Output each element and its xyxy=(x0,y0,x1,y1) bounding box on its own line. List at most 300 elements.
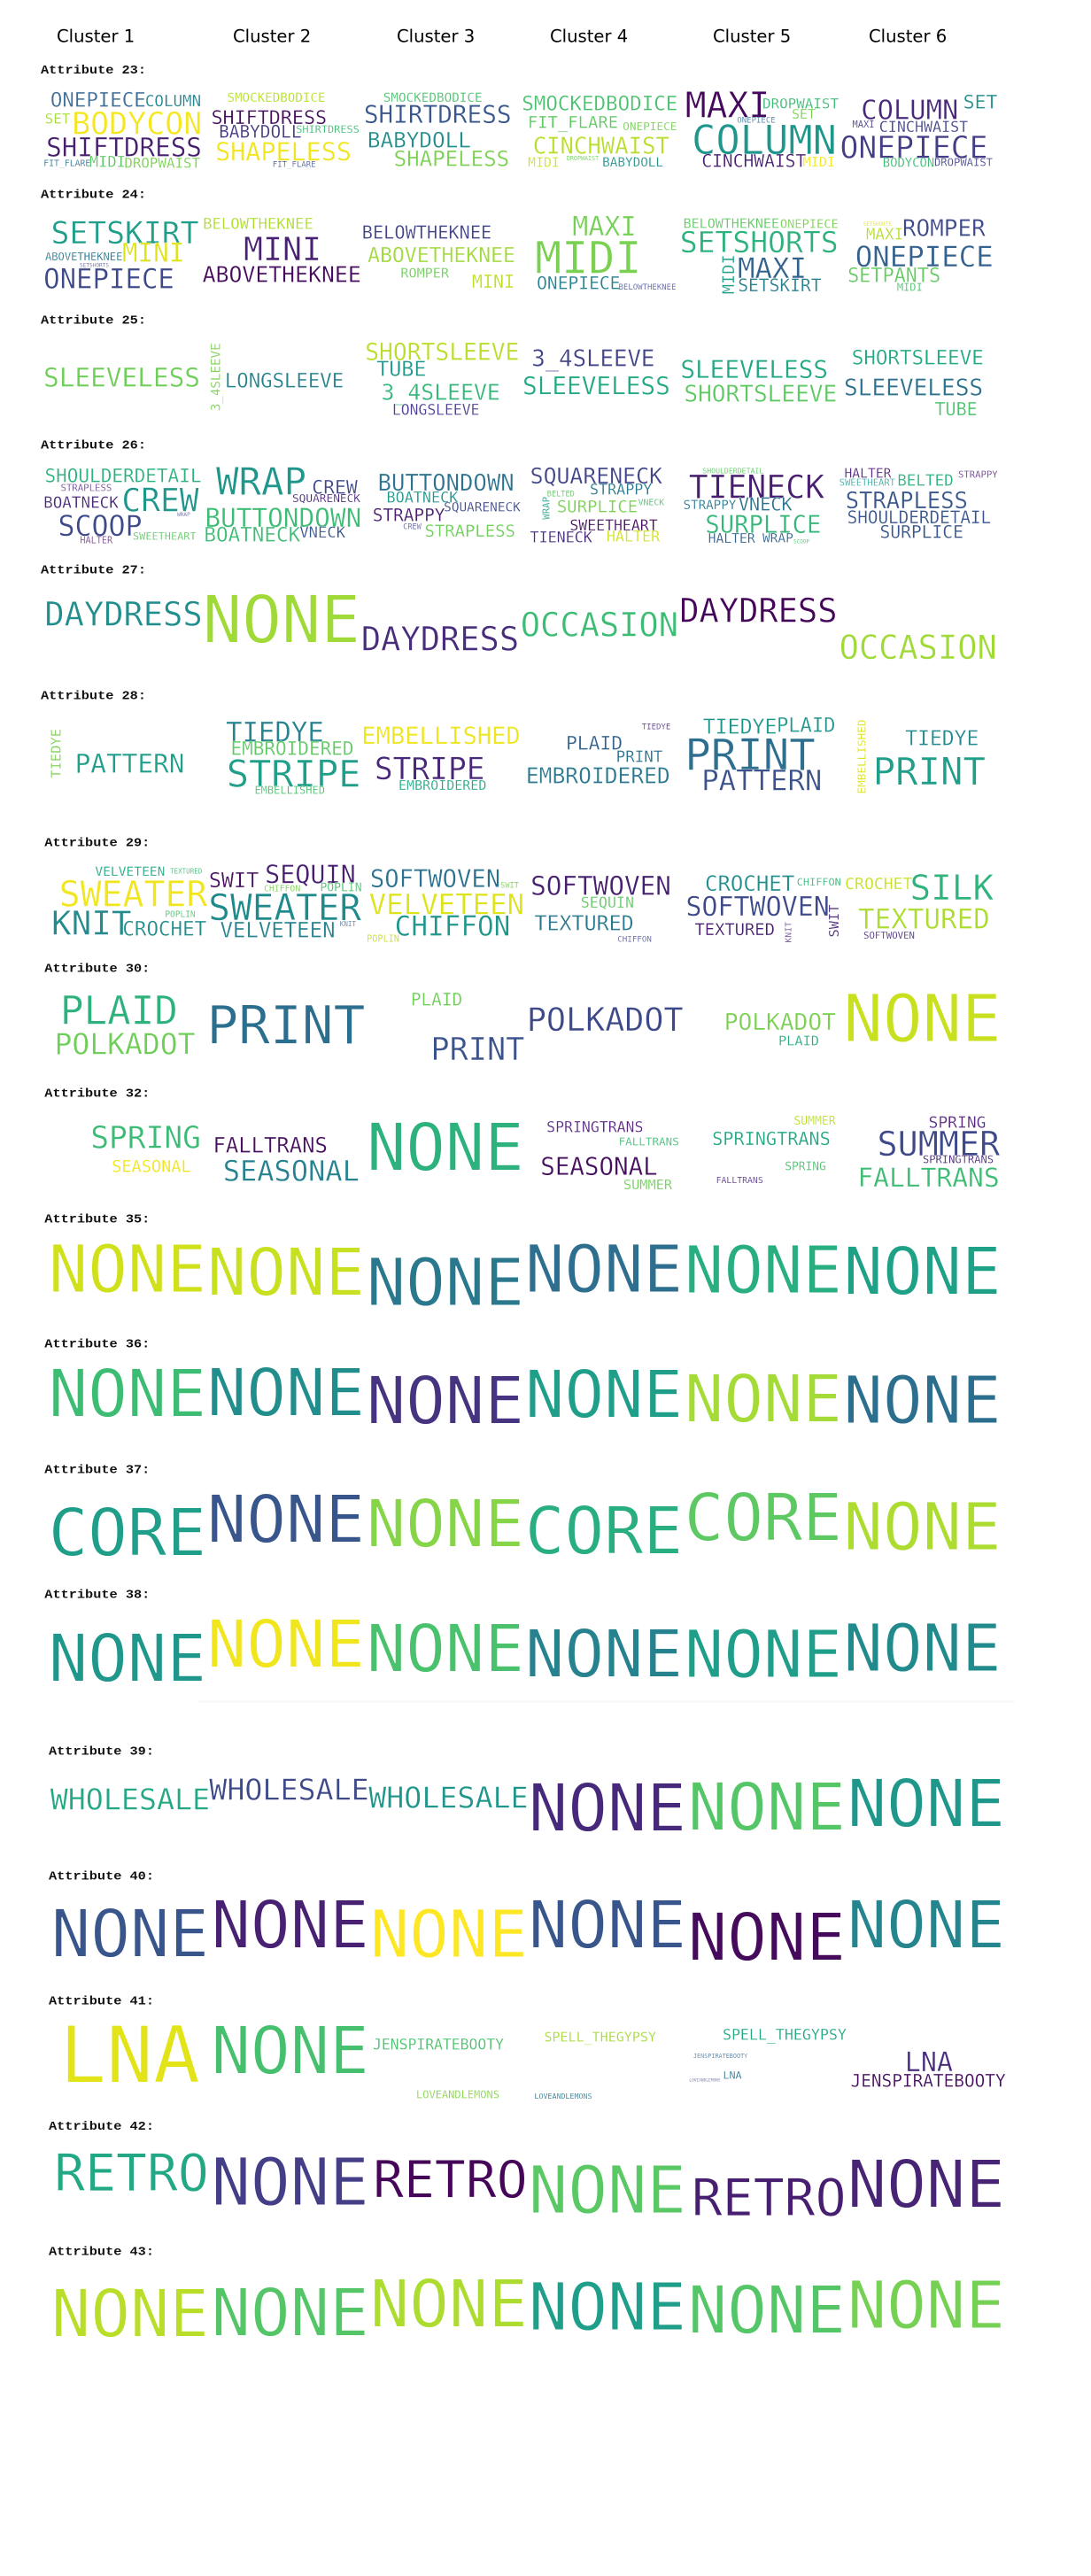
word cloud: attribute 26 cluster 4: VNECK xyxy=(638,499,664,508)
word cloud: attribute 26 cluster 3: STRAPLESS xyxy=(425,522,515,541)
panel: attribute 26 row xyxy=(41,440,998,547)
heading: cluster 6: Cluster 6 xyxy=(869,27,947,46)
word cloud: attribute 35 cluster 6: NONE xyxy=(843,1234,1002,1310)
word cloud: attribute 26 cluster 4 xyxy=(530,463,664,546)
word cloud: attribute 38 cluster 1: NONE xyxy=(49,1621,206,1697)
word cloud: attribute 23 cluster 3: SMOCKEDBODICE xyxy=(383,91,483,105)
word cloud: attribute 40 cluster 2: NONE xyxy=(211,1887,369,1963)
word cloud: attribute 32 cluster 5: SPRING xyxy=(785,1161,826,1174)
word cloud: attribute 32 cluster 6: SPRINGTRANS xyxy=(923,1153,994,1165)
word cloud: attribute 28 cluster 5: PRINT xyxy=(685,730,816,780)
word cloud: attribute 28 cluster 3: EMBELLISHED xyxy=(361,723,521,750)
word cloud: attribute 24 cluster 5: ONEPIECE xyxy=(780,218,839,232)
word cloud: attribute 28 cluster 6: EMBELLISHED xyxy=(855,719,868,794)
word cloud: attribute 28 cluster 5: PATTERN xyxy=(701,763,822,797)
word cloud: attribute 39 cluster 5: NONE xyxy=(688,1770,846,1846)
word cloud: attribute 28 cluster 6 xyxy=(855,719,986,794)
word cloud: attribute 25 cluster 4 xyxy=(522,345,670,400)
word cloud: attribute 29 cluster 4 xyxy=(530,871,671,944)
word cloud: attribute 29 cluster 5: CHIFFON xyxy=(797,876,841,888)
word cloud: attribute 25 cluster 6: SHORTSLEEVE xyxy=(852,347,984,370)
word cloud: attribute 30 cluster 2: PRINT xyxy=(206,996,365,1057)
heading: attribute 38: Attribute 38: xyxy=(44,1589,150,1602)
word cloud: attribute 26 cluster 2: BUTTONDOWN xyxy=(205,503,361,533)
word cloud: attribute 26 cluster 3 xyxy=(373,470,521,541)
word cloud: attribute 36 cluster 5: NONE xyxy=(685,1362,842,1438)
word cloud: attribute 37 cluster 3: NONE xyxy=(367,1487,524,1563)
word cloud: attribute 29 cluster 5: SOFTWOVEN xyxy=(685,892,830,923)
word cloud: attribute 32 cluster 5: FALLTRANS xyxy=(716,1176,763,1186)
word cloud: attribute 42 cluster 4: NONE xyxy=(529,2153,686,2229)
word cloud: attribute 23 cluster 5: MAXI xyxy=(685,85,770,126)
word cloud: attribute 30 cluster 6: NONE xyxy=(843,981,1002,1057)
word cloud: attribute 26 cluster 4: TIENECK xyxy=(530,529,592,546)
word cloud: attribute 41 cluster 4: SPELL_THEGYPSY xyxy=(544,2030,656,2046)
word cloud: attribute 29 cluster 3: CHIFFON xyxy=(395,911,510,943)
word cloud: attribute 24 cluster 4: BELOWTHEKNEE xyxy=(618,283,677,292)
word cloud: attribute 26 cluster 5: HALTER xyxy=(708,531,755,546)
word cloud: attribute 26 cluster 1: HALTER xyxy=(80,537,113,546)
word cloud: attribute 25 cluster 2: LONGSLEEVE xyxy=(225,370,344,393)
word cloud: attribute 37 cluster 5: CORE xyxy=(685,1480,842,1556)
word cloud: attribute 35 cluster 2: NONE xyxy=(207,1235,365,1311)
word cloud: attribute 26 cluster 2: WRAP xyxy=(216,460,306,503)
word cloud: attribute 26 cluster 3: SQUARENECK xyxy=(444,501,521,515)
heading: attribute 23: Attribute 23: xyxy=(41,65,146,78)
word cloud: attribute 24 cluster 5: SETSHORTS xyxy=(680,225,839,259)
word cloud: attribute 38 cluster 2: NONE xyxy=(207,1606,365,1683)
panel: attribute 25 row xyxy=(41,315,984,420)
word cloud: attribute 26 cluster 6: STRAPLESS xyxy=(846,488,968,514)
word cloud: attribute 41 cluster 5: JENSPIRATEBOOTY xyxy=(693,2053,747,2060)
word cloud: attribute 27 cluster 5: DAYDRESS xyxy=(679,592,838,630)
word cloud: attribute 32 cluster 4: SEASONAL xyxy=(540,1153,658,1181)
word cloud: attribute 43 cluster 6: NONE xyxy=(847,2268,1005,2344)
word cloud: attribute 24 cluster 5: MAXI xyxy=(738,251,807,285)
word cloud: attribute 32 cluster 5: SUMMER xyxy=(793,1115,836,1128)
word cloud: attribute 23 cluster 6 xyxy=(840,92,997,171)
word cloud: attribute 41 cluster 6: LNA xyxy=(905,2047,953,2078)
word cloud: attribute 25 cluster 5: SHORTSLEEVE xyxy=(684,381,837,407)
word cloud: attribute 26 cluster 6: SHOULDERDETAIL xyxy=(847,507,991,528)
word cloud: attribute 29 cluster 1: TEXTURED xyxy=(170,868,203,876)
word cloud: attribute 38 cluster 4: NONE xyxy=(525,1616,683,1692)
word cloud: attribute 29 cluster 6: CROCHET xyxy=(845,875,913,893)
panel: attribute 39 row xyxy=(49,1745,1005,1846)
word cloud: attribute 25 cluster 3: TUBE xyxy=(376,357,426,382)
word cloud: attribute 29 cluster 4: TEXTURED xyxy=(534,912,634,936)
word cloud: attribute 28 cluster 1: TIEDYE xyxy=(48,729,64,778)
word cloud: attribute 24 cluster 3: ROMPER xyxy=(400,265,450,281)
word cloud: attribute 32 cluster 4: SPRINGTRANS xyxy=(546,1118,643,1135)
word cloud: attribute 28 cluster 6: TIEDYE xyxy=(905,728,979,751)
panel: attribute 37 row xyxy=(44,1464,1002,1572)
word cloud: attribute 23 cluster 3: SHAPELESS xyxy=(394,146,509,171)
word cloud: attribute 23 cluster 1 xyxy=(43,89,202,171)
panel: attribute 27 row xyxy=(41,565,997,667)
word cloud: attribute 29 cluster 6: TEXTURED xyxy=(858,903,990,935)
word cloud: attribute 39 cluster 4: NONE xyxy=(529,1770,686,1846)
word cloud: attribute 26 cluster 2: SQUARENECK xyxy=(292,492,360,506)
word cloud: attribute 28 cluster 4 xyxy=(526,723,670,788)
word cloud: attribute 23 cluster 4: SMOCKEDBODICE xyxy=(522,92,677,115)
word cloud: attribute 28 cluster 5: TIEDYE xyxy=(703,715,777,739)
word cloud: attribute 25 cluster 4: SLEEVELESS xyxy=(522,371,670,400)
cluster column headers xyxy=(57,27,947,46)
word cloud: attribute 32 cluster 6: FALLTRANS xyxy=(857,1163,1000,1193)
word cloud: attribute 29 cluster 2: SWEATER xyxy=(208,886,361,929)
word cloud: attribute 29 cluster 4: CHIFFON xyxy=(617,934,652,944)
heading: attribute 43: Attribute 43: xyxy=(49,2247,154,2260)
word cloud: attribute 23 cluster 4: DROPWAIST xyxy=(567,155,599,162)
word cloud: attribute 38 cluster 6: NONE xyxy=(843,1611,1002,1687)
panel: attribute 23 row xyxy=(41,65,997,171)
word cloud: attribute 29 cluster 6: SILK xyxy=(909,869,994,909)
word cloud: attribute 26 cluster 4: WRAP xyxy=(541,497,553,520)
panel: attribute 35 row xyxy=(44,1213,1002,1321)
word cloud: attribute 29 cluster 6 xyxy=(845,869,994,941)
word cloud: attribute 25 cluster 4: 3_4SLEEVE xyxy=(531,345,654,372)
word cloud: attribute 26 cluster 4: STRAPPY xyxy=(590,480,652,498)
word cloud: attribute 23 cluster 4: MIDI xyxy=(528,156,560,171)
word cloud: attribute 30 cluster 1: POLKADOT xyxy=(55,1027,196,1062)
word cloud: attribute 23 cluster 1: FIT_FLARE xyxy=(43,159,90,168)
panel: attribute 40 row xyxy=(49,1870,1005,1976)
word cloud: attribute 25 cluster 5: SLEEVELESS xyxy=(680,355,828,384)
word cloud: attribute 26 cluster 1: STRAPLESS xyxy=(60,482,112,493)
word cloud: attribute 23 cluster 5: DROPWAIST xyxy=(762,96,839,112)
word cloud: attribute 24 cluster 1: ONEPIECE xyxy=(43,264,174,295)
word cloud: attribute 43 cluster 5: NONE xyxy=(688,2272,846,2348)
word cloud: attribute 26 cluster 1: BOATNECK xyxy=(43,494,119,512)
word cloud: attribute 24 cluster 6: MAXI xyxy=(866,226,903,244)
word cloud: attribute 23 cluster 2: SMOCKEDBODICE xyxy=(227,91,326,105)
word cloud: attribute 29 cluster 5 xyxy=(685,871,842,943)
word cloud: attribute 24 cluster 6: MIDI xyxy=(897,281,923,293)
heading: attribute 26: Attribute 26: xyxy=(41,440,146,453)
word cloud: attribute 26 cluster 4: SQUARENECK xyxy=(530,463,662,489)
word cloud: attribute 29 cluster 2: KNIT xyxy=(340,920,356,928)
word cloud: attribute 41 cluster 5: LNA xyxy=(723,2069,742,2082)
word cloud: attribute 30 cluster 3 xyxy=(411,990,524,1068)
word cloud: attribute 30 cluster 5: PLAID xyxy=(778,1033,819,1049)
word cloud: attribute 43 cluster 3: NONE xyxy=(370,2266,528,2342)
word cloud: attribute 29 cluster 2: VELVETEEN xyxy=(220,918,336,943)
word cloud: attribute 41 cluster 2: NONE xyxy=(211,2014,369,2090)
word cloud: attribute 28 cluster 2 xyxy=(226,717,360,797)
word cloud: attribute 42 cluster 5: RETRO xyxy=(692,2168,847,2228)
word cloud: attribute 32 cluster 6 xyxy=(857,1113,1001,1193)
word cloud: attribute 23 cluster 2: SHAPELESS xyxy=(215,138,352,167)
word cloud: attribute 25 cluster 5 xyxy=(680,355,837,407)
word cloud: attribute 26 cluster 3: BOATNECK xyxy=(386,488,459,506)
heading: cluster 5: Cluster 5 xyxy=(713,27,791,46)
word cloud: attribute 23 cluster 5: COLUMN xyxy=(692,117,837,164)
word cloud: attribute 32 cluster 2: SEASONAL xyxy=(223,1154,360,1187)
panel: attribute 36 row xyxy=(44,1338,1002,1440)
word cloud: attribute 36 cluster 2: NONE xyxy=(207,1355,365,1431)
word cloud: attribute 27 cluster 3: DAYDRESS xyxy=(361,620,519,658)
word cloud: attribute 26 cluster 5: WRAP xyxy=(762,532,793,546)
word cloud: attribute 29 cluster 3 xyxy=(367,866,524,944)
heading: cluster 3: Cluster 3 xyxy=(397,27,475,46)
word cloud: attribute 27 cluster 2: NONE xyxy=(203,583,360,659)
word cloud: attribute 29 cluster 1: CROCHET xyxy=(122,918,207,941)
word cloud: attribute 28 cluster 2: TIEDYE xyxy=(226,717,324,748)
word cloud: attribute 41 cluster 6 xyxy=(851,2047,1006,2092)
word cloud: attribute 23 cluster 4: FIT_FLARE xyxy=(528,112,618,132)
word cloud: attribute 41 cluster 4: LOVEANDLEMONS xyxy=(535,2092,592,2100)
heading: attribute 24: Attribute 24: xyxy=(41,189,146,202)
word cloud: attribute 23 cluster 1: SET xyxy=(45,110,71,127)
word cloud: attribute 26 cluster 4: BELTED xyxy=(547,491,575,499)
word cloud: attribute 30 cluster 1 xyxy=(55,989,196,1062)
panel: attribute 29 row xyxy=(44,837,994,944)
word cloud: attribute 32 cluster 1 xyxy=(90,1121,201,1176)
word cloud: attribute 29 cluster 2: CHIFFON xyxy=(264,885,300,894)
word cloud: attribute 29 cluster 5: SWIT xyxy=(826,904,842,938)
word cloud: attribute 29 cluster 2: POPLIN xyxy=(320,881,362,894)
word cloud: attribute 26 cluster 3: STRAPPY xyxy=(373,505,445,525)
word cloud: attribute 25 cluster 6: TUBE xyxy=(935,398,978,420)
word cloud: attribute 25 cluster 6: SLEEVELESS xyxy=(844,375,983,402)
word cloud: attribute 26 cluster 6: HALTER xyxy=(844,466,892,481)
panel: attribute 28 row xyxy=(41,691,986,797)
word cloud: attribute 38 cluster 3: NONE xyxy=(367,1612,524,1688)
panel: attribute 43 row xyxy=(49,2247,1005,2352)
word cloud: attribute 26 cluster 1: SHOULDERDETAIL xyxy=(44,465,202,486)
word cloud: attribute 40 cluster 5: NONE xyxy=(688,1899,846,1976)
panel: attribute 24 row xyxy=(41,189,994,296)
heading: attribute 42: Attribute 42: xyxy=(49,2121,154,2134)
word cloud: attribute 32 cluster 3: NONE xyxy=(367,1110,524,1187)
word cloud: attribute 35 cluster 3: NONE xyxy=(367,1245,524,1321)
word cloud: attribute 24 cluster 4 xyxy=(535,212,677,294)
word cloud: attribute 25 cluster 3: SHORTSLEEVE xyxy=(365,340,519,367)
word cloud: attribute 24 cluster 4: ONEPIECE xyxy=(537,274,620,294)
word cloud: attribute 26 cluster 1: CREW xyxy=(121,482,199,520)
heading: cluster 4: Cluster 4 xyxy=(550,27,628,46)
word cloud: attribute 29 cluster 2: SWIT xyxy=(209,868,259,893)
word cloud: attribute 28 cluster 2: EMBROIDERED xyxy=(230,739,354,760)
word cloud: attribute 23 cluster 1: COLUMN xyxy=(145,93,201,111)
word cloud: attribute 26 cluster 4: SURPLICE xyxy=(557,498,638,517)
word cloud: attribute 29 cluster 1: POPLIN xyxy=(165,910,196,920)
word cloud: attribute 30 cluster 1: PLAID xyxy=(60,989,178,1034)
word cloud: attribute 39 cluster 1: WHOLESALE xyxy=(50,1782,210,1816)
word cloud: attribute 29 cluster 5: TEXTURED xyxy=(694,921,775,940)
word cloud: attribute 24 cluster 1: SETSHORTS xyxy=(80,262,109,268)
word cloud: attribute 28 cluster 6: PRINT xyxy=(873,750,986,793)
word cloud: attribute 28 cluster 1 xyxy=(48,729,184,779)
word cloud: attribute 40 cluster 3: NONE xyxy=(370,1897,528,1973)
word cloud: attribute 23 cluster 3: SHIRTDRESS xyxy=(364,99,512,128)
word cloud: attribute 42 cluster 1: RETRO xyxy=(54,2143,209,2203)
word cloud: attribute 40 cluster 6: NONE xyxy=(847,1887,1005,1963)
word cloud: attribute 26 cluster 5: TIENECK xyxy=(689,468,824,507)
word cloud: attribute 29 cluster 1: VELVETEEN xyxy=(95,864,165,879)
word cloud: attribute 35 cluster 1: NONE xyxy=(49,1232,206,1308)
word cloud: attribute 28 cluster 2: EMBELLISHED xyxy=(254,785,325,797)
heading: attribute 41: Attribute 41: xyxy=(49,1995,154,2008)
word cloud: attribute 29 cluster 1: KNIT xyxy=(51,903,132,942)
word cloud: attribute 32 cluster 6: SUMMER xyxy=(878,1125,1001,1164)
word cloud: attribute 35 cluster 5: NONE xyxy=(685,1233,842,1309)
panel: attribute 38 row xyxy=(44,1589,1002,1697)
word cloud: attribute 25 cluster 2: 3_4SLEEVE xyxy=(209,343,223,411)
word cloud: attribute 30 cluster 5: POLKADOT xyxy=(724,1010,836,1036)
word cloud: attribute 24 cluster 6: ONEPIECE xyxy=(855,240,994,274)
word cloud: attribute 26 cluster 1: SCOOP xyxy=(58,511,143,543)
word cloud: attribute 37 cluster 1: CORE xyxy=(49,1496,206,1572)
word cloud: attribute 32 cluster 4 xyxy=(540,1118,679,1193)
panel: attribute 41 row xyxy=(49,1995,1006,2101)
word cloud: attribute 26 cluster 1: WRAP xyxy=(177,512,190,518)
word cloud: attribute 39 cluster 2: WHOLESALE xyxy=(209,1773,369,1807)
word cloud: attribute 29 cluster 3: POPLIN xyxy=(367,934,399,944)
word cloud: attribute 26 cluster 6: SWEETHEART xyxy=(840,477,896,488)
word cloud: attribute 23 cluster 1: SHIFTDRESS xyxy=(46,133,202,163)
word cloud: attribute 26 cluster 2: VNECK xyxy=(299,524,346,542)
word cloud: attribute 28 cluster 1: PATTERN xyxy=(75,749,184,779)
panel: attribute 32 row xyxy=(44,1087,1001,1193)
word cloud: attribute 36 cluster 1: NONE xyxy=(49,1356,206,1432)
word cloud: attribute 24 cluster 6 xyxy=(847,216,994,293)
word cloud: attribute 23 cluster 4 xyxy=(522,92,677,171)
word cloud: attribute 32 cluster 4: FALLTRANS xyxy=(619,1134,679,1148)
word cloud: attribute 24 cluster 4: MIDI xyxy=(535,233,642,284)
heading: attribute 36: Attribute 36: xyxy=(44,1338,150,1351)
word cloud: attribute 24 cluster 1: ABOVETHEKNEE xyxy=(45,251,122,263)
word cloud: attribute 24 cluster 5: BELOWTHEKNEE xyxy=(684,216,779,232)
word cloud: attribute 41 cluster 1: LNA xyxy=(59,2010,200,2101)
word cloud: attribute 28 cluster 3: EMBROIDERED xyxy=(398,777,486,793)
word cloud: attribute 23 cluster 1: ONEPIECE xyxy=(50,89,146,112)
heading: attribute 35: Attribute 35: xyxy=(44,1213,150,1226)
word cloud: attribute 32 cluster 5 xyxy=(712,1115,836,1186)
word cloud: attribute 23 cluster 2: SHIFTDRESS xyxy=(212,107,327,129)
word cloud: attribute 36 cluster 6: NONE xyxy=(843,1363,1002,1439)
word cloud: attribute 41 cluster 4 xyxy=(535,2030,656,2100)
word cloud: attribute 24 cluster 6: SETPANTS xyxy=(847,265,940,287)
word cloud: attribute 26 cluster 3: BUTTONDOWN xyxy=(378,470,515,497)
word cloud: attribute 41 cluster 3: JENSPIRATEBOOTY xyxy=(373,2036,504,2053)
word cloud: attribute 24 cluster 5: MIDI xyxy=(720,254,739,294)
word cloud: attribute 24 cluster 5 xyxy=(680,216,839,296)
word cloud: attribute 42 cluster 2: NONE xyxy=(211,2145,369,2221)
word cloud: attribute 23 cluster 6: BODYCON xyxy=(883,157,934,171)
word cloud: attribute 26 cluster 2: CREW xyxy=(312,476,358,499)
heading: attribute 29: Attribute 29: xyxy=(44,837,150,850)
word cloud: attribute 26 cluster 2 xyxy=(204,460,361,547)
word cloud: attribute 26 cluster 4: HALTER xyxy=(607,528,661,545)
word cloud: attribute 28 cluster 5: PLAID xyxy=(777,715,835,738)
word cloud: attribute 41 cluster 5: LOVEANDLEMONS xyxy=(689,2077,721,2083)
word cloud: attribute 37 cluster 6: NONE xyxy=(843,1489,1002,1566)
word cloud: attribute 27 cluster 4: OCCASION xyxy=(521,606,678,644)
word cloud: attribute 24 cluster 1: MINI xyxy=(122,238,184,268)
word cloud: attribute 24 cluster 2: BELOWTHEKNEE xyxy=(203,216,313,234)
word cloud: attribute 25 cluster 3: 3_4SLEEVE xyxy=(382,380,500,406)
word cloud: attribute 24 cluster 1: SETSKIRT xyxy=(50,216,199,251)
word cloud: attribute 23 cluster 5: MIDI xyxy=(803,154,835,170)
word cloud: attribute 30 cluster 3: PRINT xyxy=(430,1032,524,1068)
word cloud: attribute 23 cluster 6: COLUMN xyxy=(861,95,958,126)
word cloud: attribute 24 cluster 6: SETSHORTS xyxy=(863,222,892,228)
word cloud: attribute 24 cluster 2 xyxy=(203,216,361,287)
word cloud: attribute 32 cluster 1: SEASONAL xyxy=(112,1157,191,1176)
heading: attribute 40: Attribute 40: xyxy=(49,1870,154,1884)
word cloud: attribute 23 cluster 4: CINCHWAIST xyxy=(533,133,669,159)
word cloud: attribute 26 cluster 2: BOATNECK xyxy=(204,524,301,547)
word cloud: attribute 28 cluster 4: PLAID xyxy=(566,733,623,755)
word cloud: attribute 26 cluster 4: SWEETHEART xyxy=(569,517,658,534)
word cloud: attribute 28 cluster 4: TIEDYE xyxy=(642,723,670,732)
word cloud: attribute 41 cluster 6: JENSPIRATEBOOTY xyxy=(851,2071,1006,2092)
word cloud: attribute 29 cluster 6: SOFTWOVEN xyxy=(863,930,915,941)
word cloud: attribute 29 cluster 3: VELVETEEN xyxy=(369,888,524,922)
heading: attribute 27: Attribute 27: xyxy=(41,565,146,578)
word cloud: attribute 30 cluster 3: PLAID xyxy=(411,990,462,1010)
word cloud: attribute 26 cluster 6: BELTED xyxy=(897,472,954,490)
word cloud: attribute 32 cluster 2 xyxy=(213,1133,360,1187)
word cloud: attribute 37 cluster 2: NONE xyxy=(207,1482,365,1559)
word cloud: attribute 23 cluster 6: CINCHWAIST xyxy=(879,118,968,135)
word cloud: attribute 40 cluster 4: NONE xyxy=(529,1887,686,1963)
word cloud: attribute 39 cluster 3: WHOLESALE xyxy=(368,1781,529,1815)
word cloud: attribute 29 cluster 2: SEQUIN xyxy=(265,861,356,890)
word cloud: attribute 32 cluster 6: SPRING xyxy=(928,1113,987,1132)
word cloud: attribute 29 cluster 4: SEQUIN xyxy=(581,893,634,911)
word cloud: attribute 28 cluster 2: STRIPE xyxy=(227,752,360,795)
word cloud: attribute 24 cluster 6: ROMPER xyxy=(902,216,986,243)
heading: cluster 2: Cluster 2 xyxy=(233,27,311,46)
word cloud: attribute 26 cluster 5: SURPLICE xyxy=(705,512,821,539)
word cloud: attribute 29 cluster 1 xyxy=(51,864,207,942)
word cloud: attribute 29 cluster 3: SOFTWOVEN xyxy=(370,866,500,893)
word cloud: attribute 26 cluster 6 xyxy=(840,466,998,542)
word cloud: attribute 41 cluster 5 xyxy=(689,2026,847,2083)
word cloud: attribute 32 cluster 5: SPRINGTRANS xyxy=(712,1128,831,1149)
word cloud: attribute 24 cluster 3: MINI xyxy=(472,271,515,292)
word cloud: attribute 23 cluster 5 xyxy=(685,85,839,171)
heading: attribute 39: Attribute 39: xyxy=(49,1745,154,1759)
word cloud: attribute 30 cluster 5 xyxy=(724,1010,836,1049)
word cloud: attribute 43 cluster 2: NONE xyxy=(211,2275,369,2351)
word cloud: attribute 23 cluster 6: ONEPIECE xyxy=(840,131,988,166)
word cloud: attribute 38 cluster 5: NONE xyxy=(685,1617,842,1693)
word cloud: attribute 24 cluster 4: MAXI xyxy=(572,212,637,243)
word cloud: attribute 43 cluster 4: NONE xyxy=(529,2270,686,2346)
heading: attribute 37: Attribute 37: xyxy=(44,1464,150,1477)
word cloud: attribute 23 cluster 3: BABYDOLL xyxy=(368,128,471,153)
word cloud: attribute 26 cluster 5: SCOOP xyxy=(793,539,809,545)
word cloud: attribute 23 cluster 2: FIT_FLARE xyxy=(273,160,316,169)
word cloud: attribute 23 cluster 1: MIDI xyxy=(89,153,126,171)
word cloud: attribute 25 cluster 1: SLEEVELESS xyxy=(43,363,200,393)
word cloud: attribute 23 cluster 6: MAXI xyxy=(852,120,875,130)
word cloud: attribute 23 cluster 5: SET xyxy=(792,106,816,122)
word cloud: attribute 23 cluster 5: ONEPIECE xyxy=(737,117,776,126)
word cloud: attribute 43 cluster 1: NONE xyxy=(51,2276,209,2352)
word cloud: attribute 32 cluster 4: SUMMER xyxy=(623,1177,673,1193)
word cloud: attribute 23 cluster 6: DROPWAIST xyxy=(934,156,994,168)
word cloud: attribute 26 cluster 6: STRAPPY xyxy=(958,469,998,480)
heading: cluster 1: Cluster 1 xyxy=(57,27,135,46)
word cloud: attribute 23 cluster 4: ONEPIECE xyxy=(623,120,677,133)
word cloud: attribute 25 cluster 3 xyxy=(365,340,519,418)
word cloud: attribute 26 cluster 1: SWEETHEART xyxy=(133,530,197,543)
